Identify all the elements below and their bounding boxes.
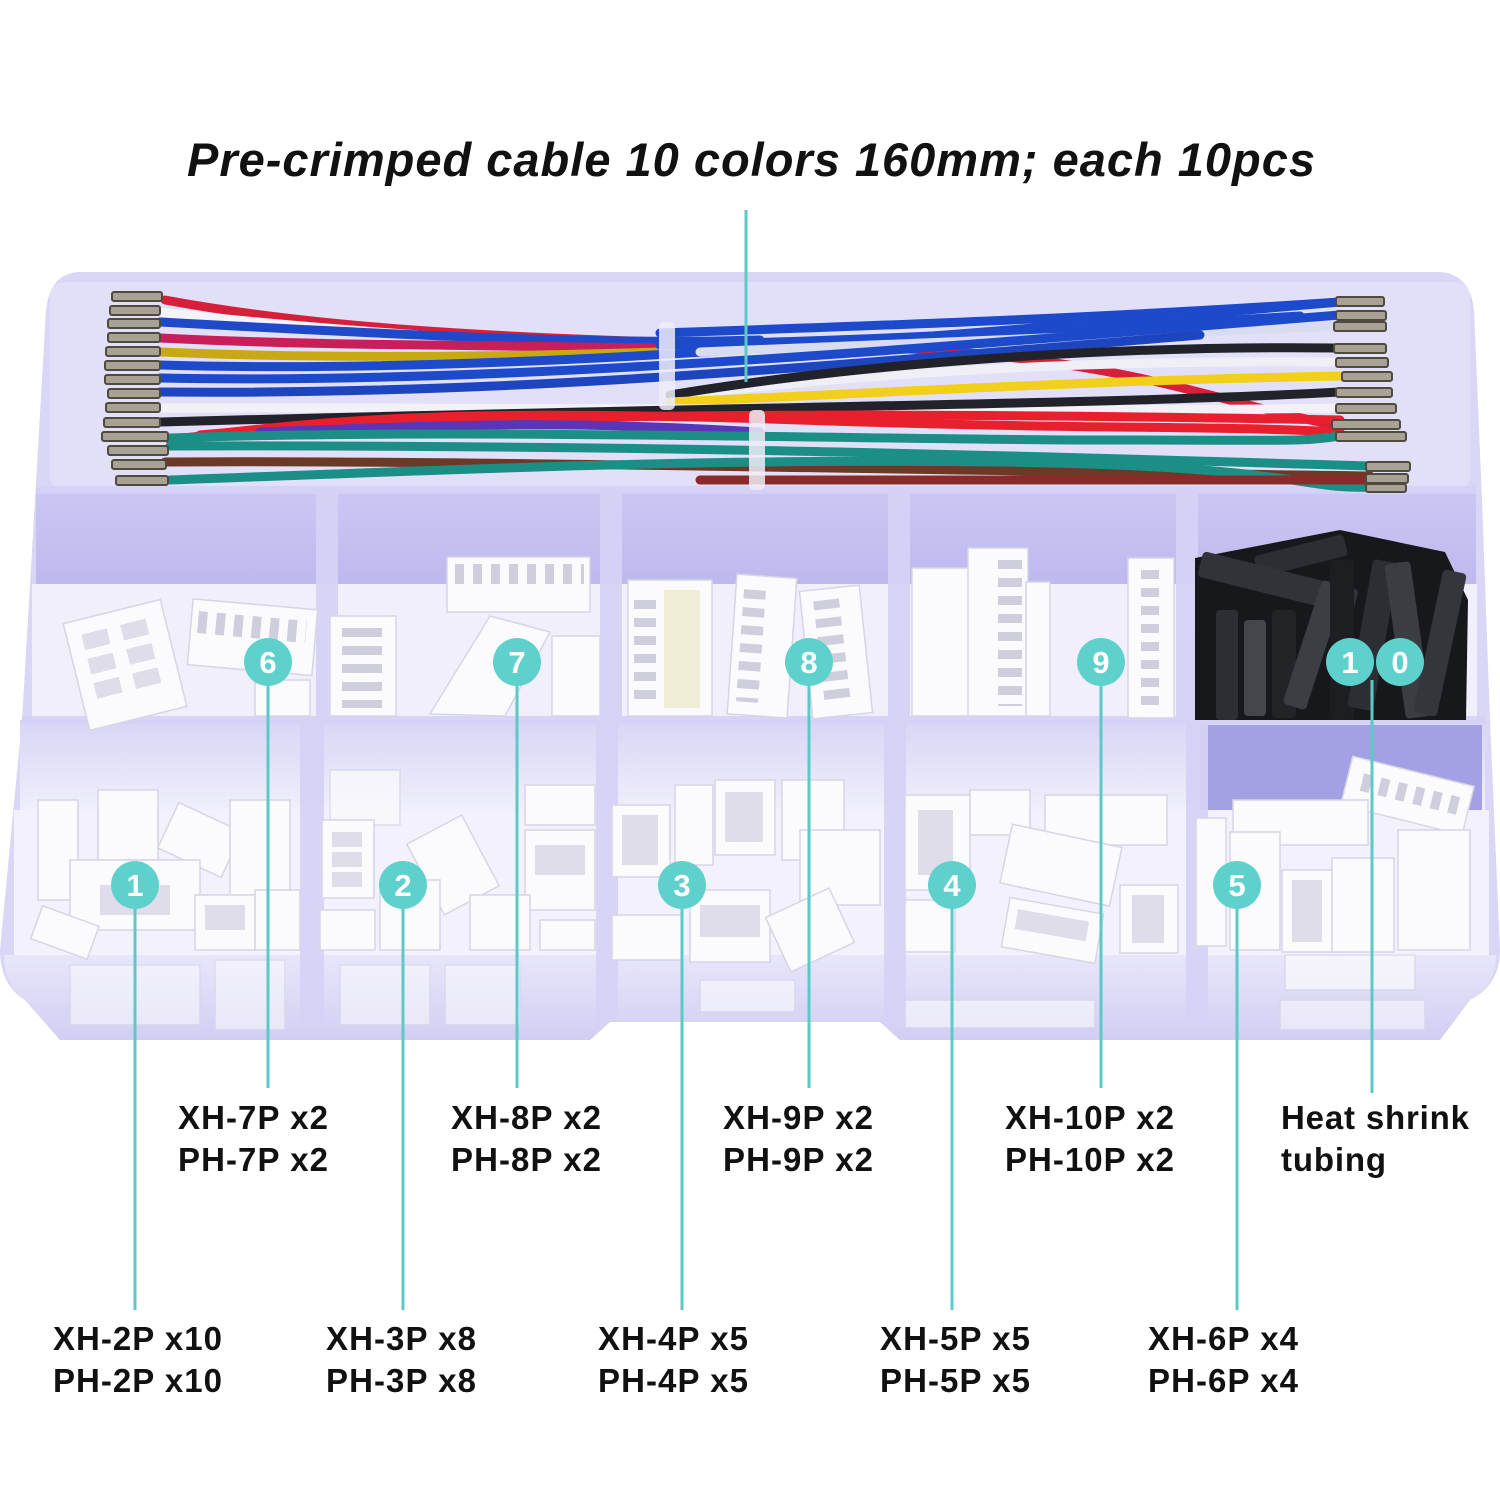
- compartment dividers: [22, 486, 1486, 1020]
- callout 1: [53, 861, 222, 1399]
- wire bundle: [160, 300, 1370, 487]
- connectors compartment 7: [330, 557, 600, 716]
- cable ties: [659, 322, 765, 490]
- dark corner wall: [1200, 725, 1482, 810]
- connectors compartment 4: [905, 790, 1178, 1028]
- callout 4: [880, 861, 1030, 1399]
- callout 8: XH-9P x2: [723, 1099, 873, 1136]
- callout 10: 1: [1341, 645, 1359, 680]
- connectors compartment 6: [63, 599, 318, 730]
- callout 2: XH-3P x8: [326, 1320, 476, 1357]
- right crimp terminals: [1332, 297, 1410, 492]
- callout 6: [178, 638, 328, 1178]
- callout 2: 2: [394, 868, 412, 903]
- callout 6: PH-7P x2: [178, 1141, 328, 1178]
- callout 8: 8: [800, 645, 818, 680]
- callout 8: PH-9P x2: [723, 1141, 873, 1178]
- callout 5: [1148, 861, 1299, 1399]
- callout 10: Heat shrink: [1281, 1099, 1470, 1136]
- callout 4: PH-5P x5: [880, 1362, 1030, 1399]
- connectors compartment 9: [912, 548, 1174, 718]
- callout 8: [723, 638, 873, 1178]
- lower row back walls: [20, 720, 1485, 810]
- left crimp terminals: [102, 292, 168, 485]
- callout 7: 7: [508, 645, 526, 680]
- plastic box: [0, 272, 1500, 1040]
- connectors compartment 5: [1196, 756, 1474, 1030]
- cable compartment floor: [50, 282, 1470, 490]
- callout 2: [326, 861, 476, 1399]
- callout 10: tubing: [1281, 1141, 1386, 1178]
- callout 4: XH-5P x5: [880, 1320, 1030, 1357]
- callout 7: [451, 638, 601, 1178]
- callout 5: XH-6P x4: [1148, 1320, 1299, 1357]
- callout 7: PH-8P x2: [451, 1141, 601, 1178]
- upper row back walls: [36, 490, 1476, 586]
- title: Pre-crimped cable 10 colors 160mm; each 10pcs: [187, 133, 1315, 186]
- front wall of box: [4, 955, 1496, 1040]
- connectors compartment 1: [31, 790, 300, 1030]
- callout 5: 5: [1228, 868, 1246, 903]
- arrow: cable callout line: [744, 210, 748, 382]
- callout 1: 1: [126, 868, 144, 903]
- callout 3: XH-4P x5: [598, 1320, 748, 1357]
- callout 6: XH-7P x2: [178, 1099, 328, 1136]
- callout 3: PH-4P x5: [598, 1362, 748, 1399]
- callout 7: XH-8P x2: [451, 1099, 601, 1136]
- callout 3: [598, 861, 748, 1399]
- callout 10: [1281, 638, 1470, 1178]
- connectors compartment 2: [320, 770, 595, 1025]
- callout 9: XH-10P x2: [1005, 1099, 1174, 1136]
- callout 9: [1005, 638, 1174, 1178]
- connectors compartment 3: [612, 780, 880, 1012]
- callout 2: PH-3P x8: [326, 1362, 476, 1399]
- callout 10: 0: [1391, 645, 1409, 680]
- connectors compartment 8: [628, 574, 873, 719]
- heat shrink tubing: [1195, 530, 1468, 720]
- callout 9: 9: [1092, 645, 1110, 680]
- callout 4: 4: [943, 868, 961, 903]
- callout 3: 3: [673, 868, 691, 903]
- lower row floors: [14, 810, 1489, 960]
- callout 1: XH-2P x10: [53, 1320, 222, 1357]
- callout 1: PH-2P x10: [53, 1362, 222, 1399]
- callout 9: PH-10P x2: [1005, 1141, 1174, 1178]
- callout 5: PH-6P x4: [1148, 1362, 1299, 1399]
- upper row floors: [32, 584, 1477, 720]
- callout 6: 6: [259, 645, 277, 680]
